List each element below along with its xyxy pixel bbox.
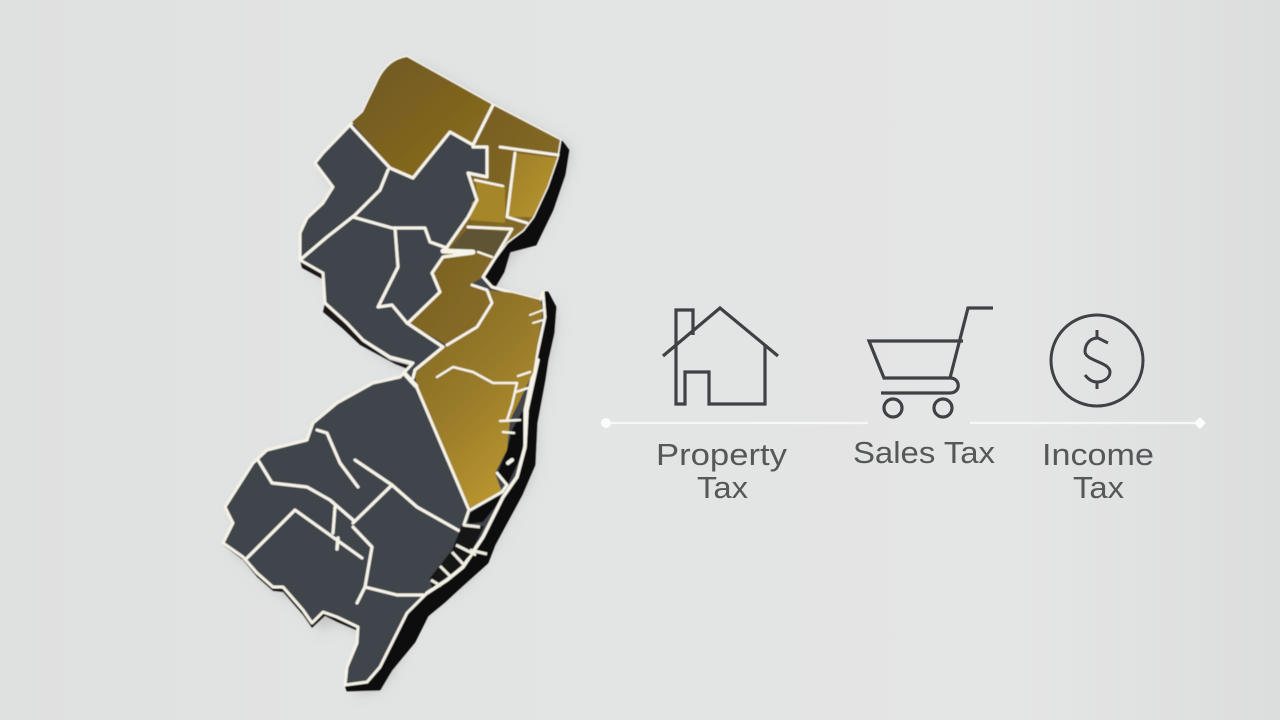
- label: property tax: [656, 437, 788, 505]
- west shore black edge: [223, 260, 415, 631]
- label: income tax: Tax: [1073, 470, 1125, 505]
- label: sales tax: Sales Tax: [853, 435, 996, 470]
- state outline in slate: [223, 57, 560, 685]
- gold region: right panel county: [508, 153, 557, 217]
- black pocket in bay: [498, 410, 523, 486]
- icon: dollar coin: [1051, 315, 1143, 406]
- barrier island detail: [430, 525, 487, 588]
- label: property tax: Property: [656, 437, 788, 472]
- label: income tax: Income: [1042, 437, 1154, 472]
- label: property tax: Tax: [697, 470, 749, 505]
- icon: house: [663, 308, 778, 404]
- gold region: shore county: [415, 290, 543, 508]
- brown region: union band: [450, 228, 510, 256]
- black inlet behind barrier strip: [468, 493, 503, 524]
- label: income tax: [1042, 437, 1154, 505]
- county borders: [247, 105, 558, 603]
- gold region: northwest county: [352, 57, 493, 178]
- gold region: hudson box: [470, 180, 505, 223]
- timeline divider: [601, 417, 1206, 429]
- icon: shopping cart: [869, 308, 993, 417]
- map of New Jersey: [223, 57, 570, 693]
- map soft shadow: [233, 65, 570, 693]
- gold region: northeast counties: [408, 105, 560, 345]
- map extruded black edge: [345, 140, 569, 691]
